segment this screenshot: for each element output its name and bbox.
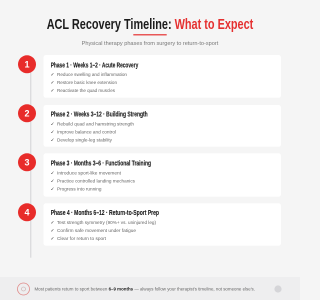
heading 3: Phase 3 · Months 3–6 · Functional Training: [51, 159, 151, 168]
checklist 2: ✓: [50, 138, 55, 143]
checklist 4: ✓: [50, 237, 55, 242]
checklist 2: Rebuild quad and hamstring strength: [57, 121, 134, 126]
checklist 1: Reduce swelling and inflammation: [57, 72, 127, 77]
badge 1: 1: [24, 60, 30, 70]
checklist 4: ✓: [50, 221, 55, 226]
checklist 3: Practice controlled landing mechanics: [57, 178, 136, 184]
footer note: Most patients return to sport between 6–9 months — always follow your therapist's timeline, not someone else's.: [34, 286, 255, 292]
icon: clock: [18, 283, 30, 295]
checklist 3: ✓: [50, 188, 55, 192]
phase 4: [18, 203, 281, 246]
checklist 2: Develop single-leg stability: [57, 137, 113, 142]
checklist 1: ✓: [50, 81, 55, 86]
checklist 1: [50, 72, 127, 94]
checklist 3: [50, 170, 136, 192]
heading 4: Phase 4 · Months 6–12 · Return-to-Sport Prep: [51, 208, 159, 217]
badge 4: 4: [24, 208, 30, 218]
badge 4: [18, 203, 36, 221]
checklist 4: Clear for return to sport: [57, 236, 107, 241]
checklist 2: [50, 121, 134, 143]
checklist 4: Test strength symmetry (90%+ vs. uninjured leg): [57, 220, 156, 225]
checklist 1: Reactivate the quad muscles: [57, 88, 116, 93]
badge 2: 2: [24, 109, 30, 119]
checklist 2: ✓: [50, 122, 55, 127]
badge 1: [18, 55, 36, 73]
checklist 2: ✓: [50, 130, 55, 135]
checklist 2: Improve balance and control: [57, 129, 116, 134]
heading 2: Phase 2 · Weeks 3–12 · Building Strength: [51, 110, 148, 118]
subtitle: Physical therapy phases from surgery to return-to-sport: [82, 41, 219, 47]
checklist 3: Progress into running: [57, 186, 102, 192]
checklist 1: ✓: [50, 73, 55, 78]
phase 3: [18, 153, 281, 197]
badge 3: [18, 153, 36, 171]
heading 1: Phase 1 · Weeks 1–2 · Acute Recovery: [51, 60, 139, 69]
checklist 4: [50, 220, 156, 242]
phase 2: [18, 104, 281, 147]
checklist 1: ✓: [50, 89, 55, 94]
phase 1: [18, 55, 281, 98]
checklist 3: ✓: [50, 172, 55, 176]
checklist 3: ✓: [50, 180, 55, 184]
title: ACL Recovery Timeline: What to Expect: [47, 16, 253, 33]
icon: grey dot: [274, 285, 282, 293]
badge 3: 3: [24, 158, 30, 168]
checklist 4: ✓: [50, 229, 55, 234]
footer bar: [0, 277, 300, 300]
badge 2: [18, 104, 36, 122]
checklist 3: Introduce sport-like movement: [57, 170, 122, 176]
checklist 4: Confirm safe movement under fatigue: [57, 228, 136, 233]
checklist 1: Restore basic knee extension: [57, 80, 117, 85]
